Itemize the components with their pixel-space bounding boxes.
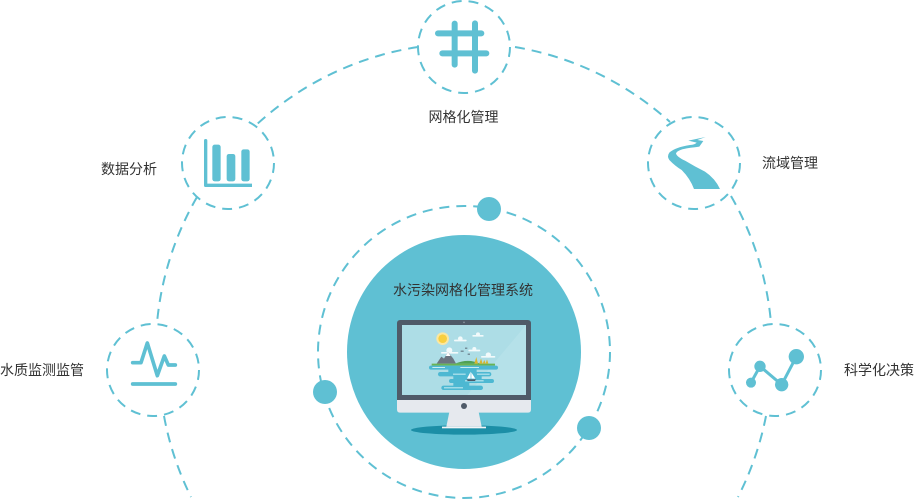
label: 水质监测监管 <box>0 362 84 378</box>
trees and land <box>432 364 495 366</box>
icon: monitor with landscape <box>397 320 531 435</box>
center disc <box>347 235 581 469</box>
center title: 水污染网格化管理系统 <box>393 282 533 298</box>
ring dot right <box>577 416 601 440</box>
node: basin management <box>648 117 818 209</box>
icon: line graph with dots <box>746 349 804 391</box>
icon: winding river <box>668 137 720 189</box>
mountains <box>437 352 456 364</box>
sailboat <box>467 372 471 379</box>
node: water quality monitoring <box>0 324 199 416</box>
label: 科学化决策 <box>844 362 914 378</box>
sun <box>436 332 449 345</box>
outer dashed arc <box>157 47 771 497</box>
ring dot top <box>477 197 501 221</box>
node: grid management <box>418 1 510 125</box>
icon: pulse line <box>133 343 175 384</box>
label: 流域管理 <box>762 155 818 171</box>
panel: central system <box>313 197 610 498</box>
node: scientific decision <box>729 324 914 416</box>
label: 数据分析 <box>101 161 157 177</box>
icon: bar chart <box>204 139 252 187</box>
birds <box>461 348 470 355</box>
label: 网格化管理 <box>428 109 498 125</box>
ring dot left <box>313 380 337 404</box>
clouds <box>441 332 495 358</box>
icon: hash grid <box>438 23 486 71</box>
node: data analysis <box>101 117 274 209</box>
inner dashed ring <box>318 206 610 498</box>
water bands <box>429 366 498 390</box>
